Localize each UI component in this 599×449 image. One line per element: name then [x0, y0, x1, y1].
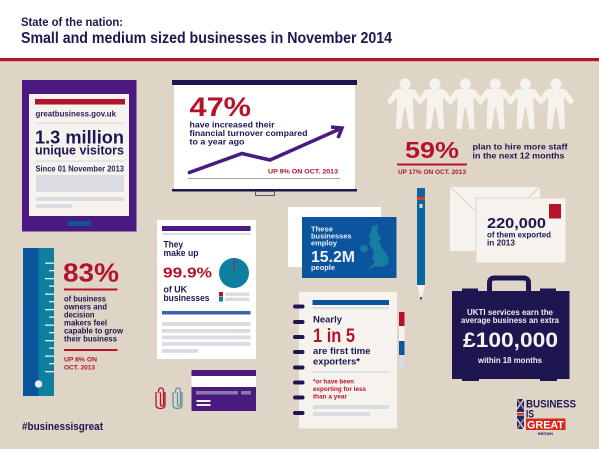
panel: briefcase £100,000: UKTI services earn the: [467, 308, 554, 317]
logo: business is great: GREAT: [527, 420, 564, 432]
icon: UK map: [360, 225, 389, 270]
panel: people hiring 59%: [387, 78, 574, 176]
panel: 83% capability stat: their business: [64, 334, 118, 344]
panel: briefcase £100,000: [452, 278, 570, 381]
panel: envelope 220,000: of them exported: [487, 230, 551, 240]
panel: envelope 220,000: [450, 187, 566, 263]
panel: tablet web visitors: [22, 80, 136, 232]
panel: briefcase £100,000: £100,000: [463, 329, 558, 352]
panel: envelope 220,000: 220,000: [487, 216, 546, 232]
icon: pencil: [417, 188, 425, 301]
logo: business is great: BRITAIN: [538, 432, 554, 436]
panel: document 99.9%: of UK: [164, 284, 187, 294]
panel: employment card 15.2M: 15.2M: [311, 249, 355, 266]
line chart arrow: [188, 127, 342, 173]
panel: presentation screen 47%: financial turnover compared: [190, 128, 308, 138]
panel: document 99.9%: businesses: [164, 293, 210, 303]
icon: ruler: [23, 248, 54, 396]
logo: business is great: BUSINESS: [526, 398, 576, 410]
panel: tablet web visitors: unique visitors: [35, 144, 124, 158]
logo: business is great: IS: [526, 408, 534, 420]
pie chart: [219, 258, 249, 288]
icon: paperclips: [156, 388, 182, 408]
panel: 83% capability stat: decision: [64, 310, 95, 320]
panel: notebook 1 in 5: exporters*: [313, 356, 360, 368]
panel: document 99.9%: [157, 220, 256, 359]
panel: briefcase £100,000: within 18 months: [477, 356, 543, 365]
panel: 83% capability stat: makers feel: [64, 318, 107, 328]
panel: notebook 1 in 5: *or have been: [313, 378, 354, 386]
panel: people hiring 59%: in the next 12 months: [472, 150, 565, 160]
panel: 83% capability stat: capable to grow: [64, 326, 124, 336]
panel: notebook 1 in 5: Nearly: [313, 314, 343, 326]
panel: notebook 1 in 5: exporting for less: [313, 386, 366, 393]
panel: briefcase £100,000: average business an extra: [461, 316, 560, 325]
panel: employment card 15.2M: people: [311, 263, 335, 272]
title: Small and medium sized businesses in November 2014: [21, 30, 392, 47]
panel: notebook 1 in 5: than a year: [313, 394, 348, 400]
panel: employment card 15.2M: These: [311, 224, 333, 234]
logo: business is great: [517, 398, 576, 436]
panel: employment card 15.2M: [288, 207, 396, 278]
panel: document 99.9%: 99.9%: [163, 264, 212, 282]
panel: tablet web visitors: greatbusiness.gov.uk: [36, 110, 117, 118]
panel: presentation screen 47%: UP 9% ON OCT. 2013: [268, 168, 338, 176]
icon: notebook rings: [293, 304, 304, 415]
panel: presentation screen 47%: [172, 80, 357, 196]
panel: people hiring 59%: UP 17% ON OCT. 2013: [398, 169, 466, 176]
panel: document 99.9%: make up: [164, 248, 199, 258]
title: [21, 17, 392, 47]
panel: notebook 1 in 5: 1 in 5: [313, 326, 355, 347]
icon: row of people: [387, 78, 574, 129]
panel: tablet web visitors: Since 01 November 2013: [36, 164, 125, 174]
panel: employment card 15.2M: employ: [311, 238, 338, 248]
panel: employment card 15.2M: businesses: [311, 232, 352, 240]
panel: people hiring 59%: 59%: [405, 137, 459, 163]
panel: 83% capability stat: owners and: [64, 302, 107, 312]
panel: envelope 220,000: in 2013: [487, 238, 516, 248]
legend: [219, 292, 250, 302]
panel: 83% capability stat: 83%: [63, 258, 119, 288]
hashtag: #businessisgreat: [22, 421, 103, 433]
panel: people hiring 59%: plan to hire more staff: [472, 142, 568, 152]
stat: 1.3 million: 1.3 million: [35, 128, 124, 148]
panel: document 99.9%: They: [164, 240, 183, 250]
panel: 83% capability stat: [63, 258, 124, 372]
title: State of the nation:: [21, 17, 123, 29]
panel: notebook 1 in 5: [293, 292, 404, 428]
panel: presentation screen 47%: 47%: [190, 92, 251, 122]
panel: 83% capability stat: of business: [64, 294, 107, 304]
panel: notebook 1 in 5: are first time: [313, 346, 370, 357]
panel: presentation screen 47%: have increased their: [190, 120, 275, 130]
panel: presentation screen 47%: to a year ago: [190, 136, 244, 146]
panel: 83% capability stat: OCT. 2013: [64, 364, 95, 372]
icon: bank card: [192, 370, 256, 411]
panel: 83% capability stat: UP 8% ON: [64, 356, 97, 364]
